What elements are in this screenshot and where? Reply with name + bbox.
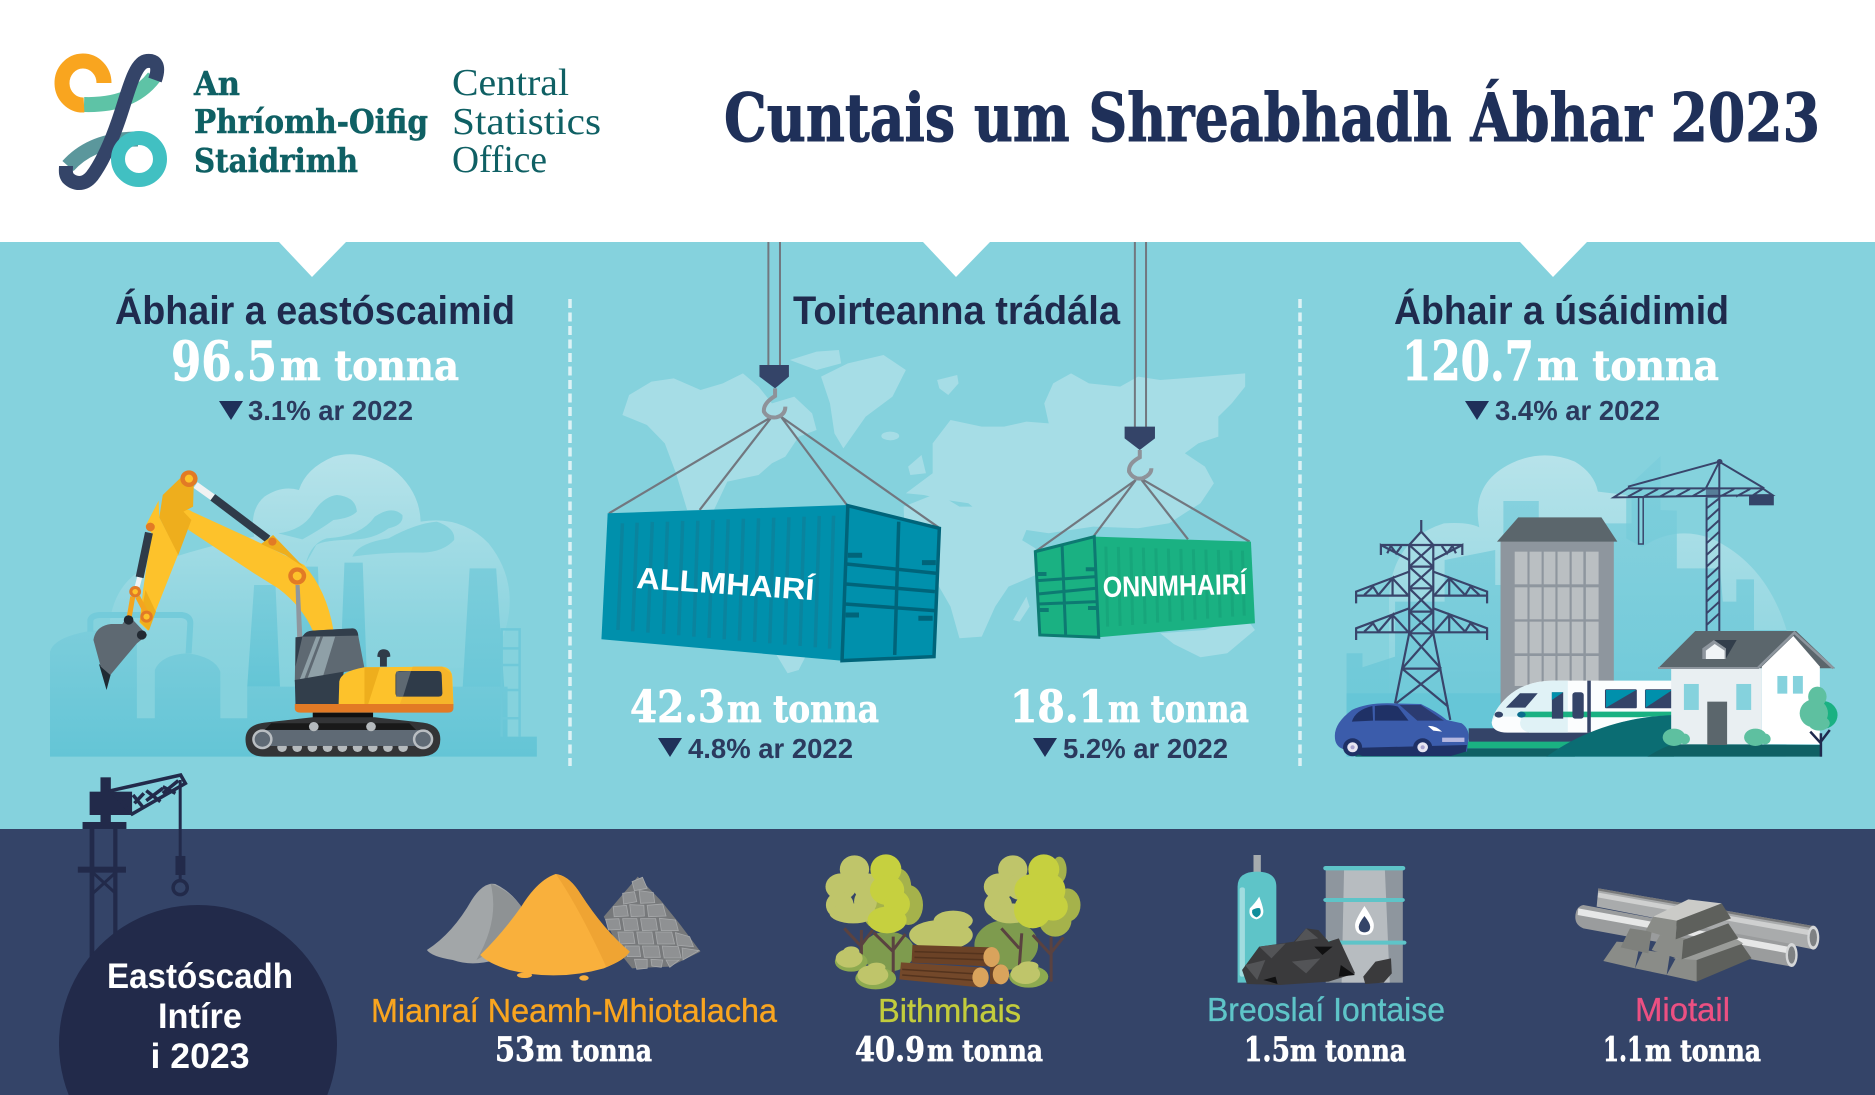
background: teal band [0,242,1875,829]
background: white header [0,0,1875,242]
world map background [622,350,1255,673]
container body [1035,537,1255,637]
logo text: English: Statistics [452,101,601,143]
heading: extraction: Ábhair a eastóscaimid [115,288,515,333]
crane cables and hook [1035,242,1250,552]
notches pointing to the three panels [279,242,1587,277]
panel: trade [601,242,1255,764]
value: 53m tonnes: 53 [495,1030,535,1070]
stat: 120.7m tonnes: m tonna [1537,342,1719,390]
panel: use [1335,288,1838,757]
logo text: Irish: Staidrimh [194,141,358,180]
icon: mineral piles [427,874,700,981]
stat: imports 18.1m tonnes: 5.2% ar 2022 [1063,733,1228,764]
illustration: city [1335,455,1838,757]
value: 1.5m tonnes: 1.5 [1244,1030,1290,1070]
heading: use: Ábhair a úsáidimid [1394,288,1729,333]
car [1335,703,1469,756]
dashed dividers [570,299,1300,766]
value: 1.5m tonnes [1244,1030,1406,1070]
material: fossil fuels [1207,855,1445,1070]
logo symbol [62,61,160,183]
value: 40.9m tonnes: m tonna [927,1034,1043,1069]
city background [1347,455,1787,757]
road and hill [1355,715,1822,757]
callout: domestic extraction in 2023 [59,905,337,1095]
icon: metal pipes and ingots [1575,888,1819,982]
stat: imports 18.1m tonnes: m tonna [1108,687,1249,731]
heading: trade: Toirteanna trádála [793,289,1121,333]
container: imports [1035,242,1255,637]
stat: 96.5m tonnes: m tonna [280,342,459,390]
material: biomass [825,854,1080,1070]
factory background [50,454,537,757]
logo text: Irish: An [193,64,240,103]
value: 1.5m tonnes: m tonna [1290,1034,1406,1069]
container body [601,505,939,661]
container: exports [601,242,939,661]
stat: 96.5m tonnes [171,329,459,393]
illustration: excavator and factory [50,454,537,757]
stat: imports 18.1m tonnes [1010,682,1249,764]
tree shadows [863,857,1080,937]
value: 1.1m tonnes [1603,1030,1761,1070]
stat: 120.7m tonnes [1402,329,1719,393]
stat: imports 18.1m tonnes: 18.1 [1010,682,1106,733]
stat: exports 42.3m tonnes: m tonna [727,687,879,731]
label: metals: Miotail [1635,991,1730,1028]
icon: trees and logs [825,854,1080,989]
house [1658,631,1835,746]
background: navy band [0,829,1875,1095]
label: biomass: Bithmhais [878,992,1021,1029]
callout: domestic extraction in 2023: i 2023 [150,1037,250,1076]
value: 40.9m tonnes: 40.9 [855,1030,925,1070]
stat change: down 3.4%: 3.4% ar 2022 [1495,395,1660,426]
label: non-metallic minerals: Mianraí Neamh-Mhiotalacha [371,992,778,1029]
stat: exports 42.3m tonnes [630,682,879,764]
train [1469,681,1673,742]
logo text: English: Central [452,62,569,104]
office building [1497,517,1617,707]
label: fossil fuels: Breoslaí Iontaise [1207,991,1445,1028]
tree [1800,687,1838,757]
panel: domestic extraction [0,775,1875,1095]
stat change: down 3.1%: 3.1% ar 2022 [248,395,413,426]
material: metals [1575,888,1819,1070]
logo text: Irish: Phríomh-Oifig [194,102,428,141]
logo: Central Statistics Office [62,61,601,183]
callout: domestic extraction in 2023: Eastóscadh [107,957,293,996]
value: 53m tonnes: m tonna [536,1034,652,1069]
stat: 120.7m tonnes: 120.7 [1402,329,1534,393]
icon: gas cylinder, barrel, coal [1238,855,1406,985]
stat: 96.5m tonnes: 96.5 [171,329,277,393]
label: imports: ONNMHAIRÍ [1102,567,1248,604]
stat: exports 42.3m tonnes: 42.3 [630,682,725,733]
electricity pylon [1356,520,1487,720]
excavator tracks [246,713,440,757]
label: exports: ALLMHAIRÍ [636,561,816,607]
excavator bucket [93,615,147,690]
logo text: English [452,62,601,181]
value: 53m tonnes [495,1030,652,1070]
value: 40.9m tonnes [855,1030,1043,1070]
tower crane [1614,459,1774,632]
value: 1.1m tonnes: m tonna [1645,1034,1761,1069]
stat: exports 42.3m tonnes: 4.8% ar 2022 [688,733,853,764]
callout: domestic extraction in 2023: Intíre [158,997,242,1036]
logo text: English: Office [452,139,547,181]
icon: quay crane [78,775,187,962]
material: non-metallic minerals [371,874,778,1070]
panel: extraction [50,288,537,757]
excavator cab [295,628,453,713]
crane cables and hook [609,242,938,527]
excavator boom [129,470,333,638]
value: 1.1m tonnes: 1.1 [1603,1030,1643,1070]
logo text: Irish [193,64,428,180]
